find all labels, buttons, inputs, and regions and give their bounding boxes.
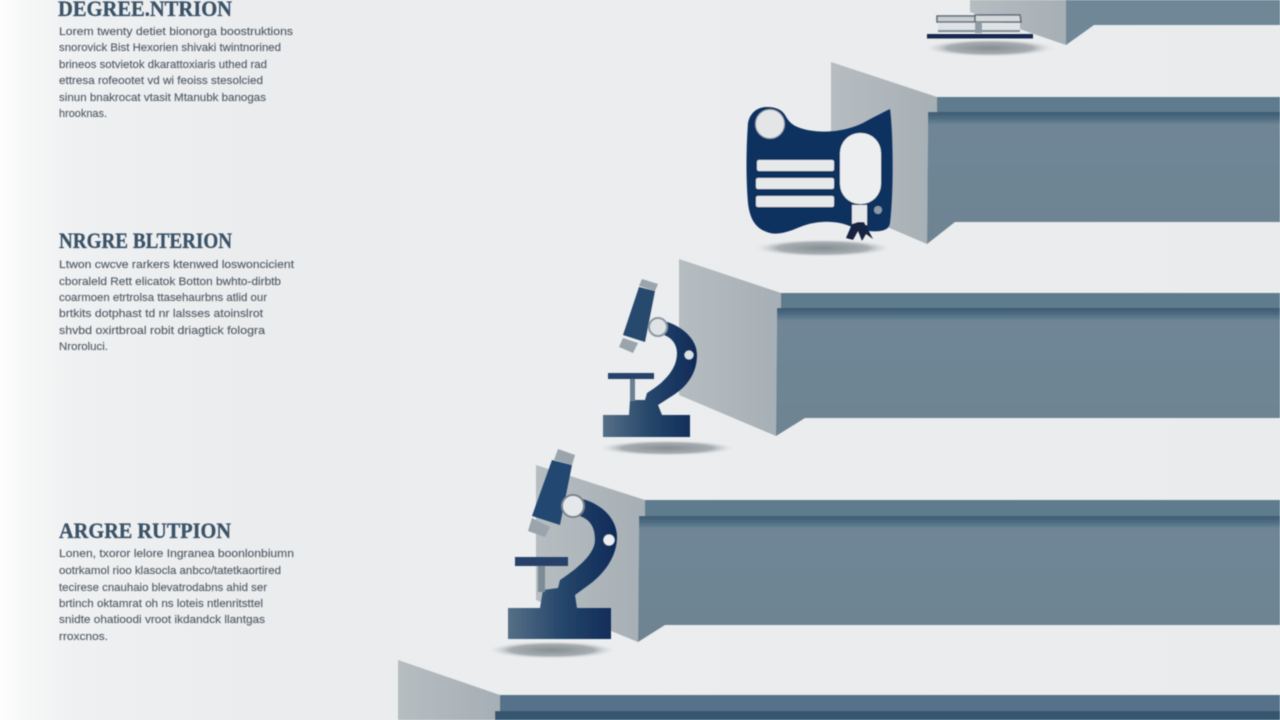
text block: degree section: Lorem twenty detiet bionorga boostruktions <box>59 26 294 38</box>
text block: argre section: Lonen, txoror lelore Ingranea boonlonbiumn <box>59 548 294 560</box>
text block: argre section <box>59 518 294 643</box>
text block: nrgre section: cboraleld Rett elicatok Botton bwhto-dirbtb <box>59 276 281 288</box>
text block: argre section: brtinch oktamrat oh ns loteis ntlenritsttel <box>59 598 263 610</box>
heading: argre: ARGRE RUTPION <box>59 518 231 543</box>
text block: degree section: snorovick Bist Hexorien shivaki twintnorined <box>59 42 281 54</box>
text block: degree section: sinun bnakrocat vtasit Mtanubk banogas <box>59 92 267 104</box>
step 5: bottom stair <box>398 660 1280 720</box>
text block: degree section <box>58 0 294 120</box>
text block: degree section: ettresa rofeootet vd wi feoiss stesolcied <box>59 75 263 87</box>
icon: diploma certificate <box>746 107 893 257</box>
text block: argre section: snidte ohatioodi vroot ikdandck llantgas <box>59 614 266 626</box>
step 4: stair with large microscope <box>536 465 1280 642</box>
text block: argre section: rroxcnos. <box>59 631 108 643</box>
step 1: top stair <box>970 0 1280 45</box>
icon: microscope large <box>487 449 617 659</box>
heading: nrgre: NRGRE BLTERION <box>59 228 232 253</box>
text block: argre section: tecirese cnauhaio blevatrodabns ahid ser <box>59 582 267 594</box>
step 2: stair with certificate <box>831 62 1280 244</box>
text block: degree section: hrooknas. <box>59 108 107 120</box>
text block: nrgre section: Nroroluci. <box>59 341 108 353</box>
step 3: stair with microscope <box>679 259 1280 436</box>
text block: argre section: ootrkamol rioo klasocla anbco/tatetkaortired <box>59 565 281 577</box>
text block: nrgre section: shvbd oxirtbroal robit driagtick fologra <box>59 325 266 337</box>
text block: nrgre section: Ltwon cwcve rarkers ktenwed loswoncicient <box>59 259 294 271</box>
icon: books on top step <box>924 15 1056 57</box>
text block: degree section: brineos sotvietok dkarattoxiaris uthed rad <box>59 59 267 71</box>
text block: nrgre section: brtkits dotphast td nr lalsses atoinslrot <box>59 308 263 320</box>
text block: nrgre section: coarmoen etrtrolsa ttasehaurbns atlid our <box>59 292 267 304</box>
icon: microscope medium <box>597 279 737 456</box>
text block: nrgre section <box>59 228 294 353</box>
